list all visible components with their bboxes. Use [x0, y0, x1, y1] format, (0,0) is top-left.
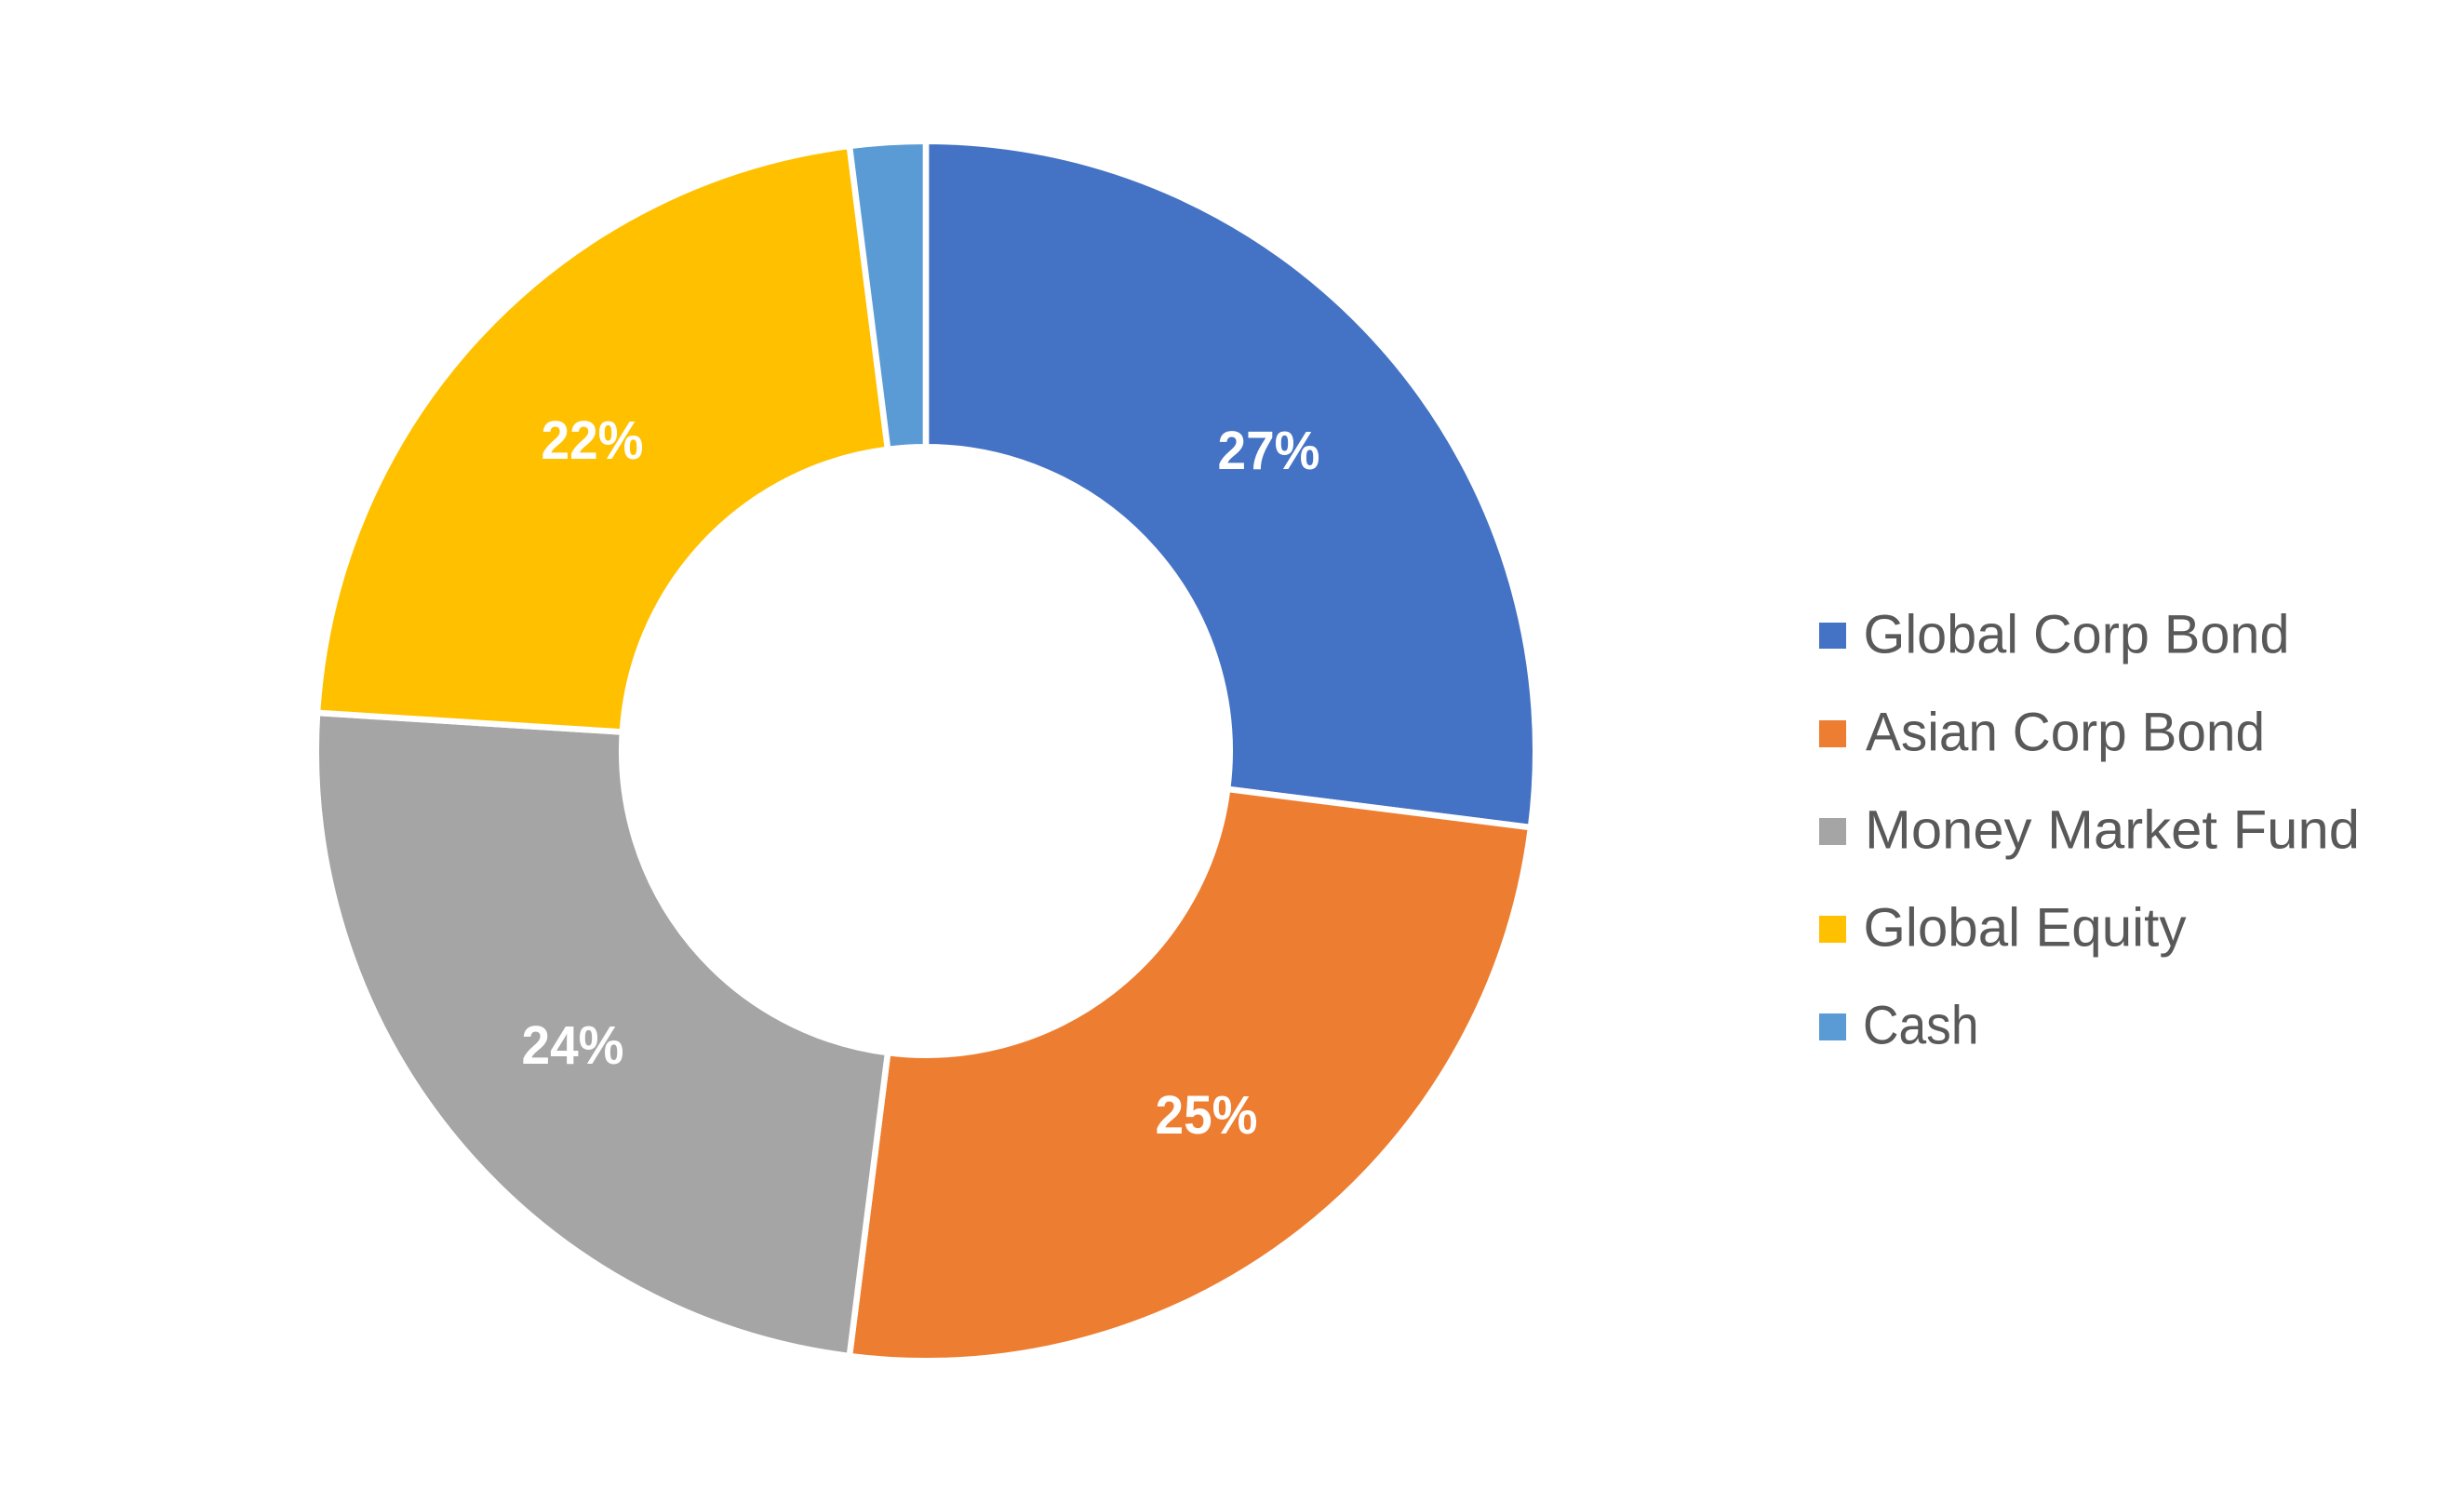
legend item: Asian Corp Bond: Asian Corp Bond [1866, 703, 2265, 763]
data label: 27%: 27% [1217, 421, 1319, 481]
legend item: Cash [1819, 996, 1978, 1056]
data label: 22%: 22% [542, 410, 644, 471]
data label: 24%: 24% [521, 1015, 623, 1076]
slice: Money Market Fund 24% [316, 713, 888, 1356]
legend [1819, 605, 2360, 1056]
data label: 25%: 25% [1156, 1085, 1258, 1146]
legend item: Global Corp Bond: Global Corp Bond [1863, 605, 2289, 665]
legend item: Money Market Fund: Money Market Fund [1865, 800, 2360, 861]
donut chart [316, 141, 1535, 1361]
slice: Cash 2% [850, 141, 926, 450]
slice: Asian Corp Bond 25% [850, 789, 1531, 1361]
legend item: Cash: Cash [1863, 996, 1978, 1056]
slice: Global Equity 22% [317, 146, 888, 731]
legend item: Global Equity: Global Equity [1863, 898, 2187, 959]
slice: Global Corp Bond 27% [926, 141, 1535, 827]
